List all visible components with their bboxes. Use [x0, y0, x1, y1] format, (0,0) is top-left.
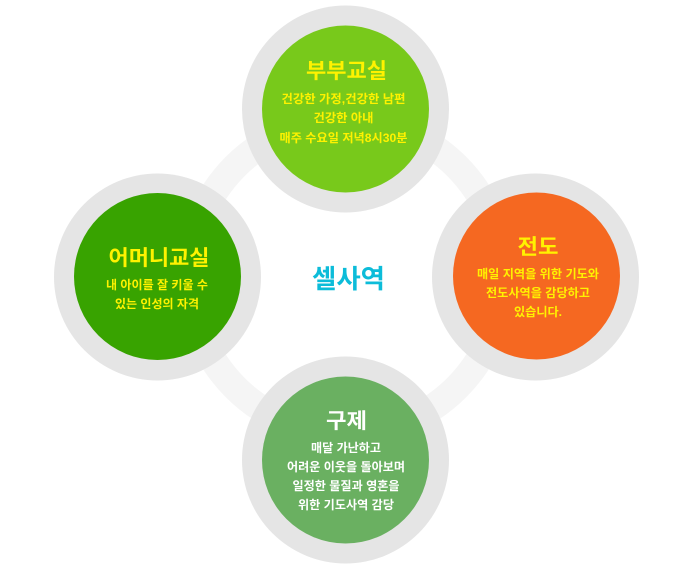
heading: evangelism: 전도	[518, 236, 558, 259]
panel: bottom circle, relief	[242, 356, 449, 564]
text block: mothers class description: 있는 인성의 자격	[115, 297, 199, 311]
text block: relief description: 매달 가난하고	[311, 440, 381, 455]
heading: couples class: 부부교실	[306, 60, 387, 83]
text block: mothers class description	[106, 277, 208, 311]
text block: evangelism description: 전도사역을 감당하고	[486, 286, 590, 300]
text block: relief description: 일정한 물질과 영혼을	[292, 478, 400, 493]
text block: relief description	[287, 440, 405, 512]
text block: relief description: 위한 기도사역 감당	[298, 497, 394, 512]
connecting ring	[190, 120, 502, 434]
heading: relief: 구제	[326, 410, 367, 433]
text block: couples class description: 건강한 아내	[314, 110, 374, 125]
heading: mothers class: 어머니교실	[108, 247, 210, 270]
text block: evangelism description: 있습니다.	[514, 304, 562, 319]
panel: right circle, evangelism	[432, 174, 639, 380]
text block: mothers class description: 내 아이를 잘 키울 수	[106, 277, 208, 292]
text block: evangelism description: 매일 지역을 위한 기도와	[477, 266, 599, 281]
center title: 셀사역	[312, 264, 385, 294]
panel: left circle, mothers class	[54, 174, 261, 380]
text block: couples class description: 매주 수요일 저녁8시30분	[280, 130, 408, 145]
panel: top circle, couples class	[242, 6, 449, 212]
text block: couples class description	[280, 91, 408, 145]
text block: couples class description: 건강한 가정,건강한 남편	[282, 91, 406, 106]
text block: evangelism description	[477, 266, 599, 319]
text block: relief description: 어려운 이웃을 돌아보며	[287, 460, 405, 474]
